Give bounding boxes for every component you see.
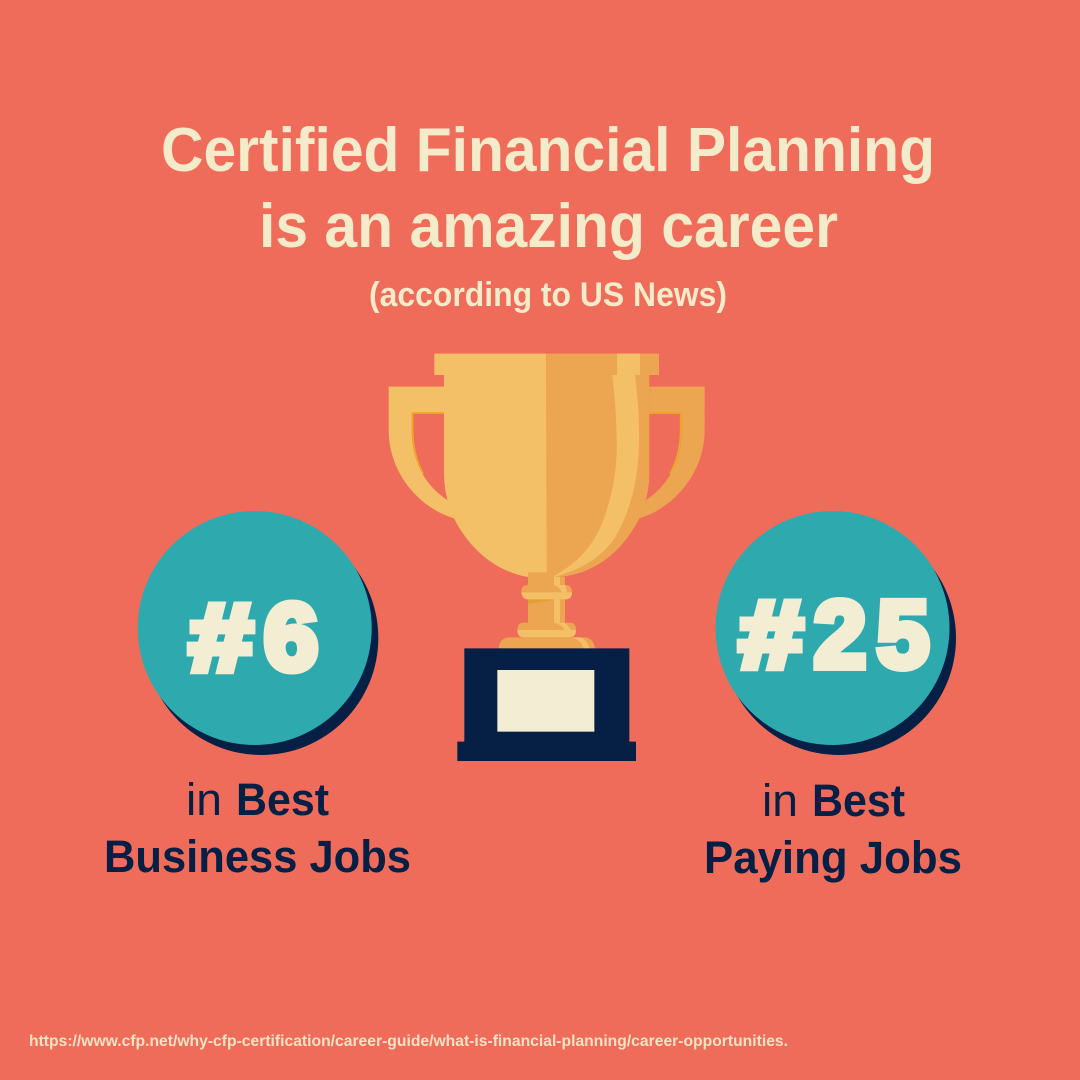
trophy stem	[517, 572, 576, 637]
badge: #6: 6	[264, 584, 318, 690]
badge: #6: #	[190, 585, 252, 691]
icon: trophy	[389, 354, 705, 761]
subtitle: (according to US News)	[369, 276, 727, 314]
title: is an amazing career	[259, 192, 838, 261]
badge: #25	[716, 511, 956, 755]
label: best business jobs: Business Jobs	[104, 831, 411, 882]
trophy plaque	[497, 670, 594, 732]
badge: #25: #	[740, 582, 802, 688]
title	[161, 116, 935, 261]
label: best paying jobs	[704, 775, 962, 883]
label: best paying jobs: in	[762, 775, 798, 826]
badge: #25: 5	[877, 582, 929, 688]
label: best business jobs: Best	[236, 774, 329, 825]
trophy top base	[499, 637, 595, 648]
badge: #25: 2	[814, 582, 866, 688]
title: Certified Financial Planning	[161, 116, 935, 185]
trophy pedestal	[457, 648, 636, 761]
source url: https://www.cfp.net/why-cfp-certification/career-guide/what-is-financial-planning/career-opportunities.	[29, 1033, 788, 1050]
label: best business jobs: in	[186, 774, 222, 825]
label: best business jobs	[104, 774, 411, 882]
label: best paying jobs: Best	[812, 775, 905, 826]
badge: #6	[138, 511, 378, 755]
label: best paying jobs: Paying Jobs	[704, 832, 962, 883]
trophy cup	[434, 354, 659, 577]
trophy handles	[389, 387, 705, 518]
